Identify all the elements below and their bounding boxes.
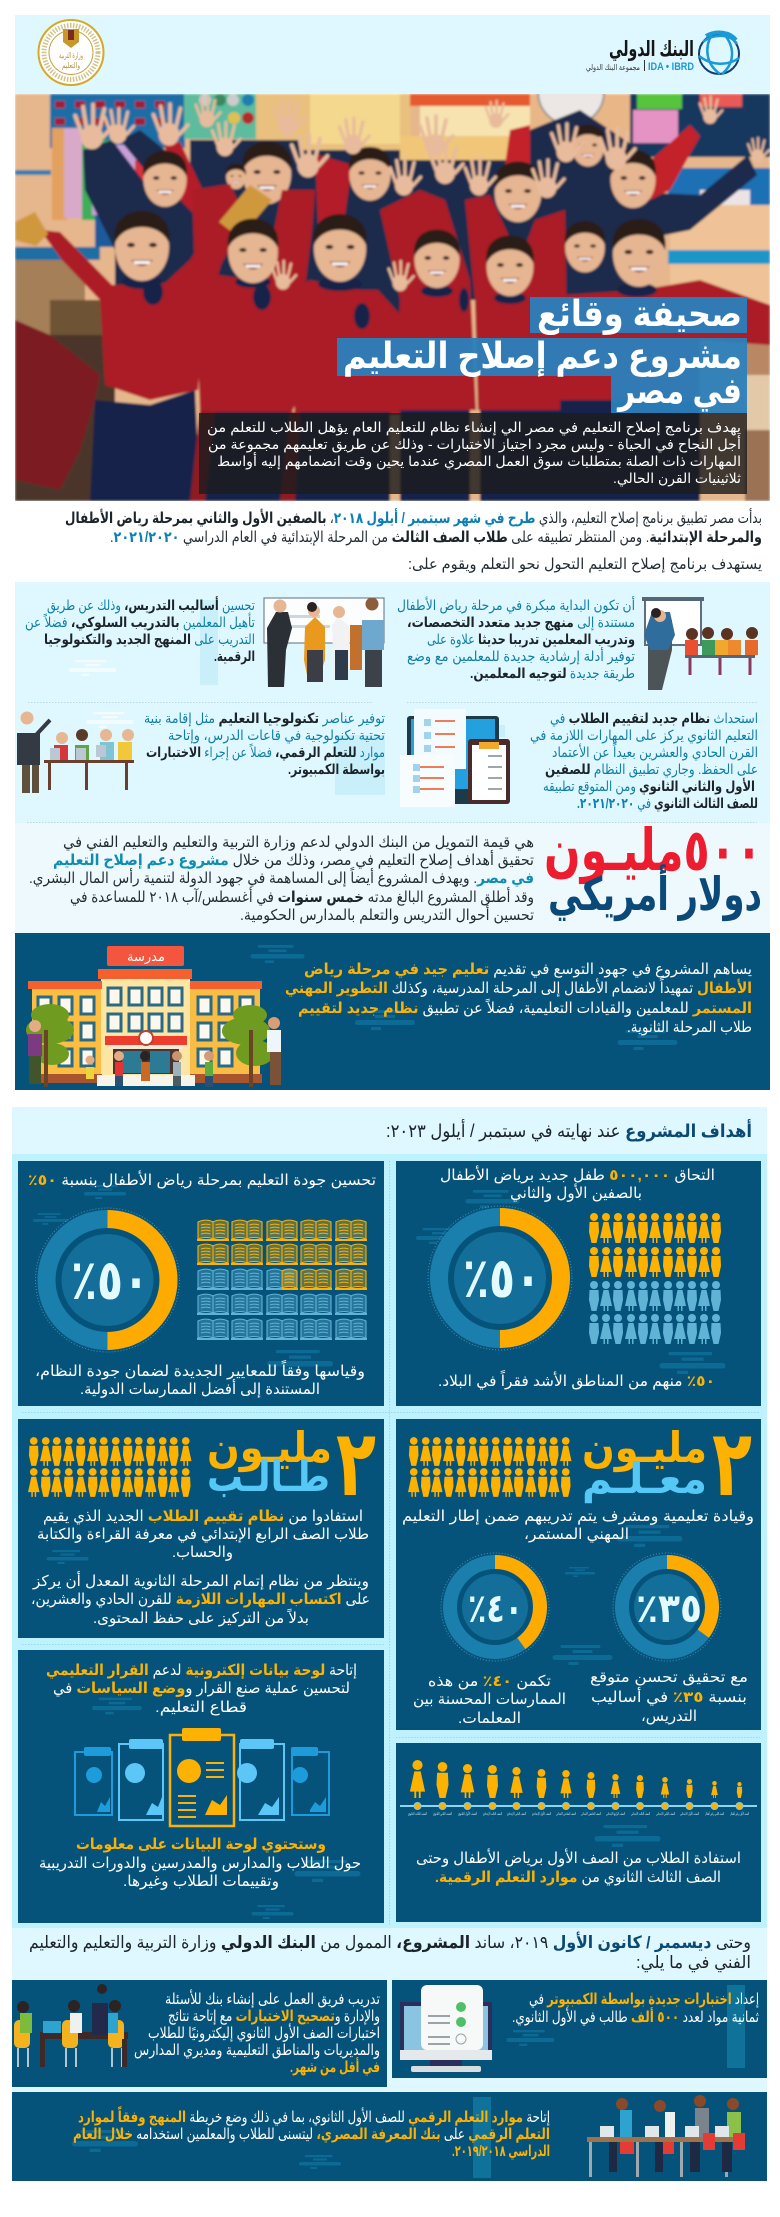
- progress heading: الفني في ما يلي:: [636, 1953, 751, 1973]
- card: digital learning resources: استفادة الطلاب من الصف الأول برياض الأطفال وحتى: [416, 1848, 741, 1867]
- card: question bank training: [12, 1980, 387, 2087]
- intro paragraph: والمرحلة الإبتدائية. ومن المنتظر تطبيقه على طلاب الصف الثالث من المرحلة الإبتدائية في العام الدراسي ٢٠٢١/٢٠٢٠.: [110, 529, 762, 547]
- icon: instructor and students at laptops: [17, 712, 134, 793]
- title: project name: في مصر: [616, 370, 742, 412]
- donut: 50 percent: [428, 1206, 572, 1350]
- back row navy sweaters: [82, 109, 758, 315]
- pillar: teaching methods: التدريب على المنهج الجديد والتكنولوجيا: [44, 631, 255, 648]
- icon: five dashboard clipboards: [75, 1728, 329, 1826]
- logo text: World Bank: [586, 38, 694, 73]
- back row faces: [143, 151, 187, 207]
- stat: 2 million teachers: [582, 1413, 752, 1515]
- card: kindergarten quality: المستندة إلى أفضل الممارسات الدولية.: [80, 1379, 320, 1398]
- card: 2 million teachers: مع تحقيق تحسن متوقع: [590, 1669, 748, 1686]
- funding text: تحسين أحوال التدريس والتعلم بالمدارس الحكومية.: [240, 905, 534, 924]
- title: project name: [337, 335, 747, 413]
- funding uses text: [285, 961, 752, 1036]
- card: new kindergarten pupils: التحاق ٥٠٠,٠٠٠ طفل جديد برياض الأطفال: [440, 1165, 715, 1184]
- chart: grade timeline: الصف الثالث الإعدادي: [483, 1811, 502, 1817]
- pillar: student assessment: التعليم الثانوي يركز على المهارات اللازمة في: [530, 727, 758, 744]
- navy collars and school badges: [122, 275, 657, 329]
- donut: 40 percent: ٤٠٪: [468, 1587, 523, 1631]
- logo text: World Bank: IDA • IBRD: [648, 61, 694, 73]
- funding text: [29, 834, 534, 924]
- intro paragraph: [65, 508, 762, 547]
- programme lead-in: يستهدف برنامج إصلاح التعليم التحول نحو التعلم ويقوم على:: [408, 556, 762, 573]
- pillar: education technology: بواسطة الكمبيوتر.: [288, 761, 385, 778]
- icon: World Bank globe: [699, 33, 739, 74]
- card: data dashboard: إتاحة لوحة بيانات إلكترونية لدعم القرار التعليمي: [46, 1662, 357, 1679]
- chart: grade timeline: الصف الثاني الثانوي: [433, 1811, 452, 1816]
- pillar: early start: توفير أدلة إرشادية جديدة للمعلمين مع وضع: [407, 647, 635, 665]
- chart: grade timeline: الصف الثالث الثانوي: [408, 1811, 427, 1816]
- card: computer-based tests: [392, 1980, 767, 2078]
- heading: أهداف المشروع عند نهايته في سبتمبر / أيلول ٢٠٢٣:: [386, 1119, 752, 1142]
- pillar: education technology: [144, 710, 385, 778]
- stat: 2 million teachers: مليـون: [582, 1424, 707, 1473]
- backpack: [15, 320, 100, 490]
- card: 2 million teachers: المعلمات.: [458, 1710, 521, 1727]
- icon: Egyptian ministry seal: والتعليم: [62, 61, 80, 70]
- front row navy trousers: [90, 390, 700, 501]
- donut: 40 percent: [441, 1553, 549, 1661]
- icon: students at shared desk: [587, 2095, 745, 2177]
- stat: 2 million students: مليـون: [207, 1424, 332, 1473]
- card: computer-based tests: ثمانية مواد لعدد ٥٠٠ ألف طالب في الأول الثانوي.: [512, 2007, 759, 2027]
- pillar: student assessment: الأول والثاني الثانوي ومن المتوقع تطبيقه: [543, 778, 755, 796]
- card: 2 million students: [18, 1413, 384, 1638]
- chart: grade timeline: الصف الثاني رياض أطفال: [705, 1811, 724, 1816]
- card: kindergarten quality: وقياسها وفقاً للمعايير الجديدة لضمان جودة النظام،: [35, 1360, 365, 1380]
- panel: funding amount: [15, 818, 770, 933]
- stat: 2 million teachers: ٢: [712, 1413, 752, 1515]
- card: 2 million students: والحساب.: [172, 1544, 233, 1561]
- icon: group of teachers in training: [264, 598, 384, 687]
- donut: 50 percent: ٥٠٪: [463, 1246, 541, 1309]
- card: question bank training: والإدارة وتصحيح الاختبارات مع إتاحة نتائج: [168, 2008, 380, 2025]
- chart: grade timeline: الصف الثاني الإعدادي: [507, 1811, 526, 1817]
- chart: grade timeline: الصف الرابع الابتدائي: [606, 1811, 625, 1816]
- card: 2 million teachers: بنسبة ٣٥٪ في أساليب: [591, 1687, 747, 1707]
- chart: grade timeline: الصف الأول الابتدائي: [680, 1811, 699, 1816]
- logo text: World Bank: مجموعة البنك الدولي: [586, 63, 640, 72]
- funding text: وقد أطلق المشروع البالغ مدته خمس سنوات في أغسطس/آب ٢٠١٨ للمساعدة في: [70, 887, 534, 907]
- progress heading: [29, 1932, 751, 1973]
- logo text: World Bank: البنك الدولي: [609, 38, 694, 61]
- donut: 50 percent: [36, 1208, 180, 1352]
- raised hands: [75, 104, 112, 149]
- pillar: early start: [397, 596, 635, 682]
- header band: [15, 15, 770, 94]
- card: 2 million teachers: المهني المستمر،: [524, 1526, 629, 1544]
- card: 2 million students: طلاب الصف الرابع الإبتدائي في معرفة القراءة والكتابة: [37, 1526, 369, 1544]
- card: data dashboard: لتحسين عملية صنع القرار ووضع السياسات في: [53, 1680, 350, 1698]
- card: digital learning resources: الصف الثالث الثانوي من موارد التعلم الرقمية.: [435, 1869, 721, 1887]
- card: kindergarten quality: [18, 1161, 384, 1406]
- card: 2 million teachers: [396, 1413, 761, 1730]
- card: data dashboard: قطاع التعليم.: [155, 1699, 247, 1716]
- card: 2 million teachers: وقيادة تعليمية ومشرف يتم تدريبهم ضمن إطار التعليم: [402, 1508, 754, 1525]
- donut: 35 percent: [613, 1553, 721, 1661]
- card: 2 million students: استفادوا من نظام تقييم الطلاب الجديد الذي يقيم: [43, 1508, 363, 1526]
- pillar: student assessment: على الحفظ. وجاري تطبيق النظام للصفين: [545, 761, 758, 778]
- intro text on dark box: [199, 413, 747, 494]
- intro text on dark box: أجل النجاح في الحياة - وليس مجرد اجتياز الاختبارات - وذلك عن طريق تعليمهم مجموعة من: [208, 435, 741, 453]
- pillar: early start: مستندة إلى منهج جديد متعدد التخصصات،: [407, 614, 635, 631]
- card: question bank training: اختبارات الصف الأول الثانوي إليكترونيًا للطلاب: [148, 2023, 380, 2043]
- chart: grade timeline: الصف الأول الإعدادي: [532, 1811, 551, 1817]
- front row red uniforms: [40, 184, 770, 420]
- card: digital learning resources: [396, 1743, 761, 1922]
- pictogram: children: [589, 1213, 721, 1344]
- illustration: school building: مدرسة: [127, 949, 165, 965]
- funding uses text: الأطفال تمهيداً لانضمام الأطفال إلى المرحلة المدرسية، وكذلك التطوير المهني: [285, 977, 752, 997]
- pictogram: students: [28, 1437, 192, 1497]
- funding uses text: طلاب المرحلة الثانوية.: [627, 1019, 752, 1036]
- pictogram: books: [197, 1220, 367, 1340]
- yellow gloves: [15, 185, 272, 246]
- card: 2 million students: على اكتساب المهارات اللازمة للقرن الحادي والعشرين،: [31, 1591, 370, 1609]
- pictogram: teachers: [408, 1437, 572, 1497]
- card: new kindergarten pupils: بالصفين الأول والثاني: [510, 1183, 642, 1203]
- intro text on dark box: يهدف برنامج إصلاح التعليم في مصر الي إنشاء نظام للتعليم العام يؤهل الطلاب للتعلم من: [207, 419, 741, 436]
- intro text on dark box: المهارات ذات الصلة بمتطلبات سوق العمل المصري عندما يحين وقت انضمامهم إليه أواسط: [217, 452, 741, 470]
- card: kindergarten quality: تحسين جودة التعليم بمرحلة رياض الأطفال بنسبة ٥٠٪: [28, 1170, 376, 1189]
- chart: grade timeline: الصف الثالث الابتدائي: [631, 1811, 650, 1816]
- title: project name: مشروع دعم إصلاح التعليم: [343, 335, 742, 377]
- progress heading: وحتى ديسمبر / كانون الأول ٢٠١٩، ساند المشروع، الممول من البنك الدولي وزارة التربية والتعليم والتعليم: [29, 1932, 751, 1953]
- funding uses text: المستمر للمعلمين والقيادات التعليمية، فضلاً عن تطبيق نظام جديد لتقييم: [298, 998, 752, 1017]
- small hands: [272, 261, 296, 290]
- illustration: school building: [26, 946, 281, 1087]
- card: data dashboard: [18, 1650, 384, 1923]
- card: data dashboard: وستحتوي لوحة البيانات على معلومات: [76, 1836, 326, 1854]
- pillar: early start: طريقة جديدة لتوجيه المعلمين.: [470, 665, 635, 682]
- pillar: education technology: توفير عناصر تكنولوجيا التعليم مثل إقامة بنية: [144, 710, 385, 727]
- stat: 2 million students: ٢: [336, 1413, 376, 1515]
- donut: 35 percent: ٣٥٪: [636, 1587, 702, 1631]
- stat: 2 million students: طـالـب: [207, 1453, 330, 1500]
- chart: grade timeline: الصف السادس الابتدائي: [556, 1811, 576, 1816]
- pillar: teaching methods: [25, 596, 255, 665]
- chart: grade timeline: الصف الأول الثانوي: [458, 1811, 477, 1816]
- intro text on dark box: ثلاثينيات القرن الحالي.: [613, 470, 741, 487]
- big number: 500 million dollars: [544, 818, 762, 921]
- pillar: student assessment: [530, 710, 758, 813]
- card: data dashboard: وتقييمات الطلاب وغيرها.: [123, 1873, 279, 1890]
- chart: grade timeline: الصف الخامس الابتدائي: [581, 1811, 601, 1816]
- card: 2 million teachers: الممارسات المحسنة بين: [413, 1691, 566, 1708]
- title: fact sheet: صحيفة وقائع: [537, 293, 742, 335]
- card: 2 million teachers: التدريس،: [641, 1708, 697, 1725]
- card: 2 million students: وينتظر من نظام إتمام المرحلة الثانوية المعدل أن يركز: [32, 1571, 369, 1590]
- card: digital learning materials: الدراسي ٢٠١٩/٢٠١٨.: [452, 2143, 550, 2160]
- card: question bank training: والمديريات والمناطق التعليمية ومديري المدارس: [134, 2042, 380, 2060]
- card: new kindergarten pupils: [396, 1161, 761, 1406]
- pillar: student assessment: استحداث نظام جديد لتقييم الطلاب في: [550, 710, 758, 727]
- icon: Egyptian ministry seal: وزارة التربية: [59, 51, 83, 60]
- stat: 2 million students: [207, 1413, 376, 1515]
- card: data dashboard: حول الطلاب والمدارس والمدرسين والدورات التدريبية: [39, 1855, 361, 1872]
- front row faces: [115, 211, 169, 281]
- card: digital learning materials: التعلم الرقمي على بنك المعرفة المصري، ليتسنى للطلاب والمعلمين استخدامه خلال العام: [73, 2126, 550, 2144]
- card: digital learning materials: إتاحة موارد التعلم الرقمي للصف الأول الثانوي، بما في ذلك وضع خريطة المنهج وفقاً لموارد: [78, 2106, 550, 2127]
- card: question bank training: تدريب فريق العمل على إنشاء بنك للأسئلة: [165, 1989, 380, 2008]
- hero photo: schoolchildren waving in classroom: [15, 59, 770, 501]
- icon: tablet with test papers: [400, 709, 510, 807]
- pillar: teaching methods: تحسين أساليب التدريس، وذلك عن طريق: [47, 596, 255, 614]
- pillar: early start: وتدريب المعلمين تدريبا حديثا علاوة على: [427, 631, 635, 648]
- chart: grade timeline: [400, 1760, 757, 1817]
- stat: 2 million teachers: معـلـم: [582, 1455, 707, 1503]
- card: 2 million teachers: تكمن ٤٠٪ من هذه: [428, 1673, 551, 1690]
- funding text: هي قيمة التمويل من البنك الدولي لدعم وزارة التربية والتعليم والتعليم الفني في: [63, 834, 534, 852]
- icon: team around table: [14, 1984, 128, 2067]
- chart: grade timeline: الصف الأول رياض أطفال: [730, 1811, 749, 1816]
- chart: grade timeline: الصف الثاني الابتدائي: [656, 1811, 675, 1816]
- card: question bank training: في أقل من شهر.: [290, 2057, 380, 2076]
- card: 2 million students: بدلاً من التركيز على حفظ المحتوى.: [93, 1608, 309, 1627]
- funding uses text: يساهم المشروع في جهود التوسع في تقديم تعليم جيد في مرحلة رياض: [304, 961, 752, 979]
- icon: computer with exam paper: [400, 1985, 492, 2072]
- pillar: education technology: تحتية تكنولوجية في قاعات الدرس، وإتاحة: [168, 727, 385, 744]
- card: digital learning materials: [12, 2092, 767, 2181]
- section: progress to December 2019: [12, 1928, 767, 2181]
- panel: four reform pillars: [15, 582, 770, 823]
- funding text: تحقيق أهداف إصلاح التعليم في مصر، وذلك من خلال مشروع دعم إصلاح التعليم: [53, 850, 534, 870]
- donut: 50 percent: ٥٠٪: [71, 1248, 149, 1311]
- section: project targets: [12, 1107, 767, 1928]
- icon: Egyptian ministry seal: [38, 20, 104, 85]
- pillar: teaching methods: تأهيل المعلمين بالتدريب السلوكي، فضلاً عن: [25, 612, 255, 631]
- pillar: teaching methods: الرقمية.: [214, 648, 255, 665]
- icon: teacher with kindergarten pupils: [642, 597, 758, 690]
- card: new kindergarten pupils: ٥٠٪ منهم من المناطق الأشد فقراً في البلاد.: [438, 1370, 715, 1391]
- funding text: في مصر. ويهدف المشروع أيضاً إلى المساهمة في جهود الدولة لتنمية رأس المال البشري.: [29, 867, 534, 888]
- pillar: early start: أن تكون البداية مبكرة في مرحلة رياض الأطفال: [397, 596, 635, 614]
- pillar: education technology: موارد للتعلم الرقمي، فضلاً عن إجراء الاختبارات: [146, 743, 385, 761]
- panel: school access and teaching: [15, 933, 770, 1090]
